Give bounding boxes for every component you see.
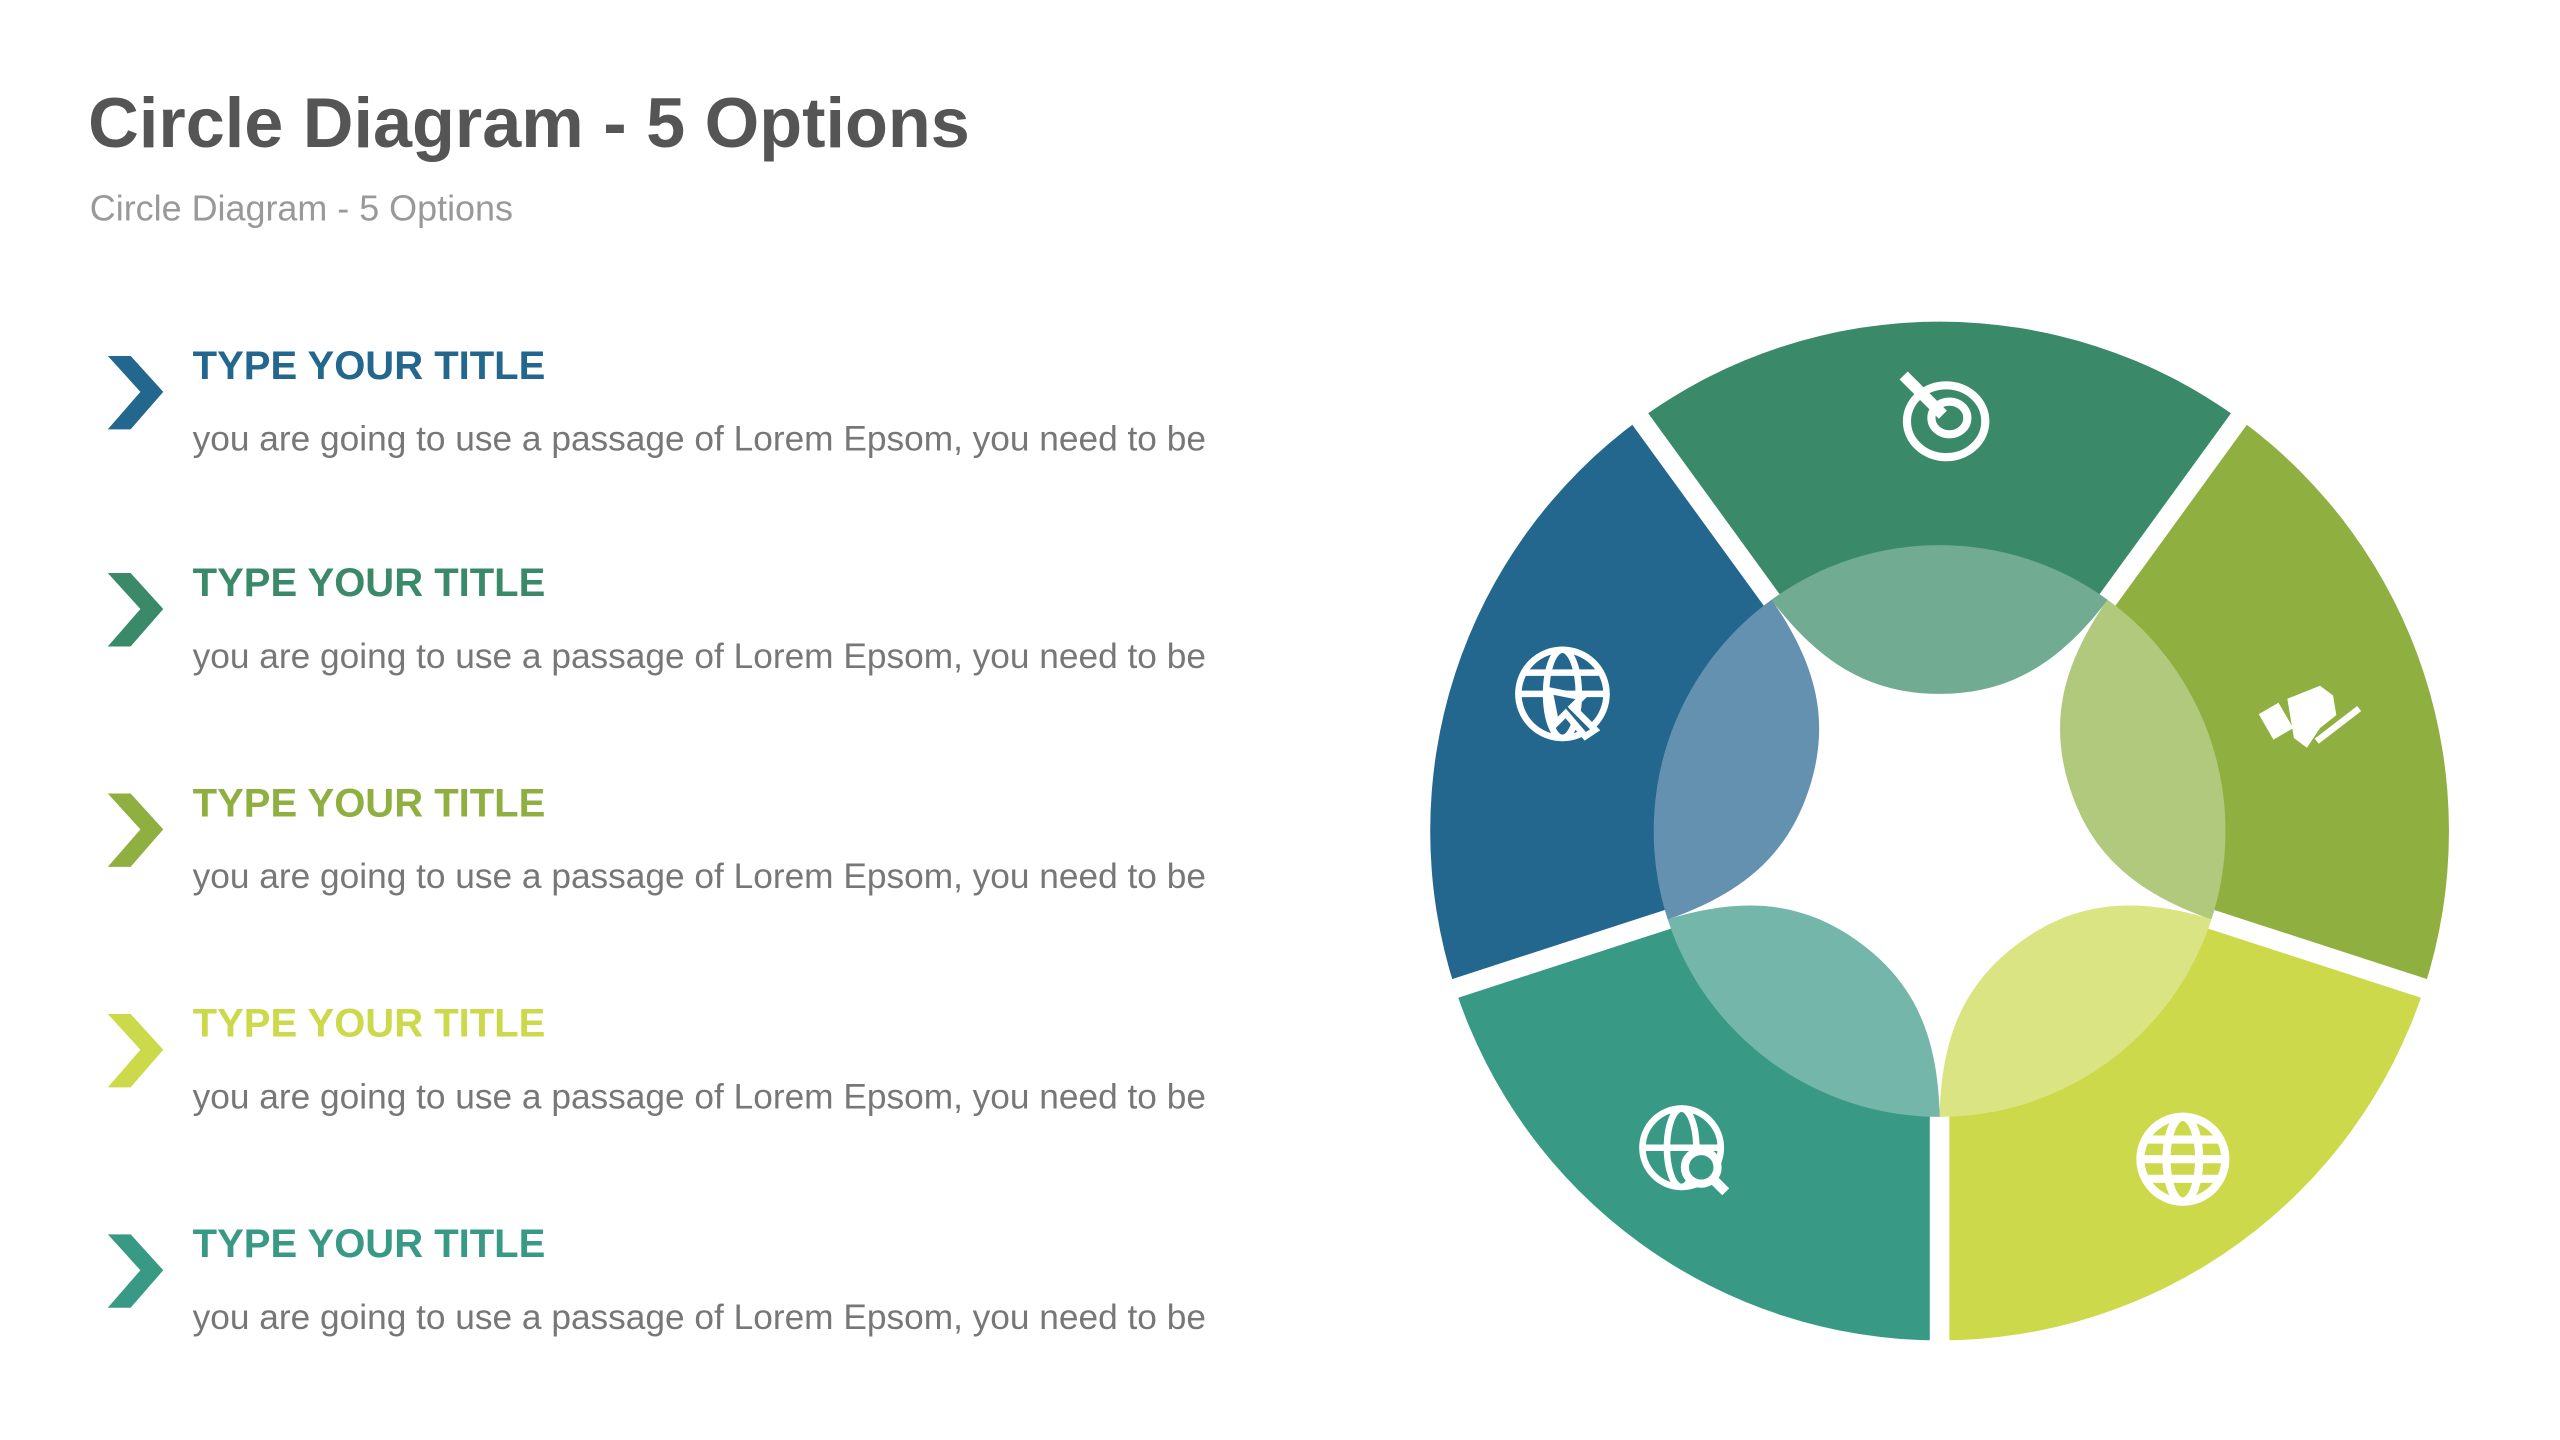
chevron icon 3 [108,794,164,867]
body 2: you are going to use a passage of Lorem Epsom, you need to be [193,635,1206,676]
segment: left blue [1363,389,1831,1051]
lobe: left [1616,583,1861,949]
item 4 [108,1002,1206,1117]
item 1 [108,344,1206,459]
body 1: you are going to use a passage of Lorem Epsom, you need to be [193,418,1206,459]
icon: target [1904,376,1985,457]
chevron icon 4 [108,1014,164,1088]
lobe: bottom right [1884,843,2244,1161]
lobe: bottom left [1635,843,1995,1161]
item 3 [108,782,1206,896]
segment: top green [1640,322,2239,620]
icon: globe cursor [1518,650,1607,738]
item 2 [108,562,1206,676]
lobe: right [2018,583,2263,949]
chevron icon 1 [108,356,164,430]
chevron icon 5 [108,1234,164,1308]
icon: globe phone [2140,1117,2225,1202]
heading 2: TYPE YOUR TITLE [193,562,545,606]
heading 4: TYPE YOUR TITLE [193,1002,545,1047]
body 5: you are going to use a passage of Lorem Epsom, you need to be [193,1296,1206,1337]
icon: globe search [1642,1109,1726,1192]
lobe: top [1771,545,2108,694]
body 4: you are going to use a passage of Lorem Epsom, you need to be [193,1076,1206,1117]
subtitle: Circle Diagram - 5 Options [90,188,513,229]
heading 3: TYPE YOUR TITLE [193,782,545,826]
segment: bottom left teal [1398,826,2058,1419]
icon: handshake [2259,686,2359,748]
chevron icon 2 [108,573,164,646]
item 5 [108,1223,1206,1337]
heading 1: TYPE YOUR TITLE [193,344,545,389]
segment: right olive [2048,389,2517,1051]
body 3: you are going to use a passage of Lorem Epsom, you need to be [193,856,1206,896]
heading 5: TYPE YOUR TITLE [193,1223,545,1267]
title: Circle Diagram - 5 Options [88,85,970,163]
segment: bottom right yellow-green [1822,826,2481,1419]
